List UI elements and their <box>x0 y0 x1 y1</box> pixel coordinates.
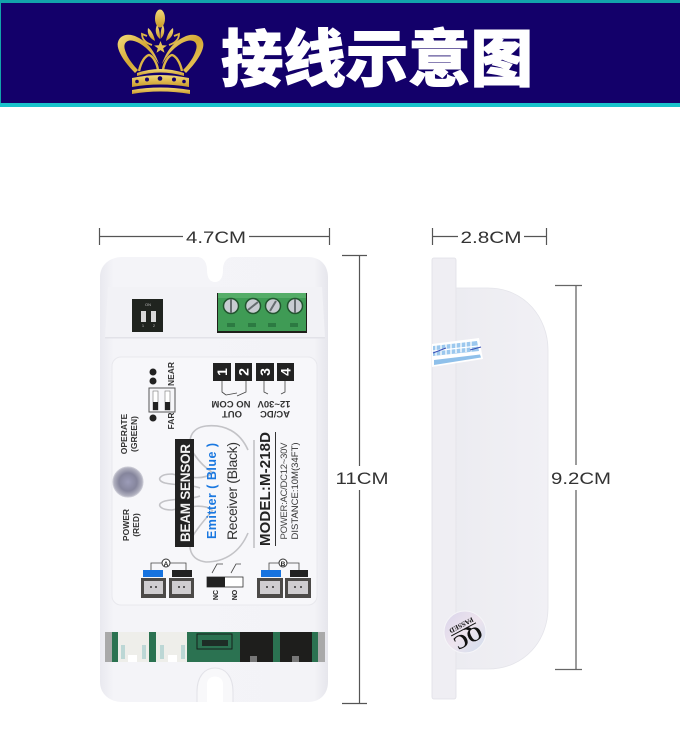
device housing <box>100 257 328 702</box>
flange <box>432 258 456 699</box>
NC / NO switch: NO <box>232 589 239 600</box>
panel: front view of sensor device: Receiver (Black) <box>224 442 240 540</box>
side dimension: height 9.2CM <box>551 286 611 670</box>
icon: gold crown <box>118 10 203 94</box>
front dimension: width 4.7CM <box>100 228 330 247</box>
QC passed sticker: PASSED <box>448 615 475 635</box>
DIP switch: ON <box>145 302 151 307</box>
top recess <box>105 287 325 338</box>
wiring diagram <box>222 381 285 396</box>
LED labels: POWER <box>121 509 131 541</box>
A/B range switch: FAR <box>166 412 176 430</box>
DIP switch: 1 <box>142 323 145 328</box>
QC passed sticker <box>444 611 486 654</box>
NC / NO switch: NC <box>213 590 220 600</box>
DIP switch <box>132 299 163 332</box>
side dimension: width 2.8CM <box>432 228 546 247</box>
output labels: NO COM <box>211 398 251 409</box>
NC / NO switch <box>207 564 243 600</box>
side dimension: width 2.8CM: 2.8CM <box>460 228 522 247</box>
green screw terminal <box>217 293 307 333</box>
label sticker <box>112 357 317 605</box>
model text <box>257 432 301 546</box>
model text: DISTANCE:10M(34FT) <box>290 442 301 540</box>
connector group A <box>141 559 194 598</box>
bottom circuit board window <box>105 632 325 662</box>
output labels: OUT <box>222 408 242 419</box>
model text: POWER:AC/DC12~30V <box>279 442 290 540</box>
terminal number boxes: 3 <box>257 368 273 376</box>
bottom mounting slot <box>197 668 233 702</box>
DIP switch: 2 <box>153 323 156 328</box>
LED <box>113 467 143 497</box>
connector group B: B <box>281 561 286 568</box>
terminal number boxes <box>213 363 294 381</box>
output labels: AC/DC <box>260 408 290 419</box>
LED labels: OPERATE <box>119 413 129 454</box>
panel: side view of sensor device <box>432 258 548 699</box>
blue test sticker <box>432 338 483 367</box>
front dimension: height 11CM <box>336 256 388 704</box>
connector group B <box>257 559 311 598</box>
header banner <box>0 0 680 107</box>
panel: front view of sensor device <box>100 257 328 702</box>
LED labels: (GREEN) <box>129 416 139 452</box>
rounded body <box>456 288 548 669</box>
side dimension: height 9.2CM: 9.2CM <box>551 469 611 488</box>
terminal number boxes: 2 <box>236 368 252 376</box>
LED labels <box>119 413 141 541</box>
LED labels: (RED) <box>131 513 141 537</box>
QC passed sticker: QC <box>449 621 486 654</box>
connector group A: A <box>164 561 169 568</box>
terminal number boxes: 4 <box>278 368 294 376</box>
title: 接线示意图 <box>221 9 533 99</box>
front dimension: height 11CM: 11CM <box>336 469 388 488</box>
terminal number boxes: 1 <box>214 368 230 376</box>
A/B range switch <box>149 362 176 430</box>
output labels: 12~30V <box>257 398 291 409</box>
A/B range switch: NEAR <box>166 362 176 386</box>
BEAM SENSOR label: BEAM SENSOR <box>178 444 193 542</box>
emitter / receiver text: Emitter ( Blue ) <box>205 443 219 539</box>
output labels <box>211 398 291 419</box>
watermark crown <box>160 426 254 562</box>
front dimension: width 4.7CM: 4.7CM <box>186 228 246 247</box>
model text: MODEL:M-218D <box>257 432 274 546</box>
